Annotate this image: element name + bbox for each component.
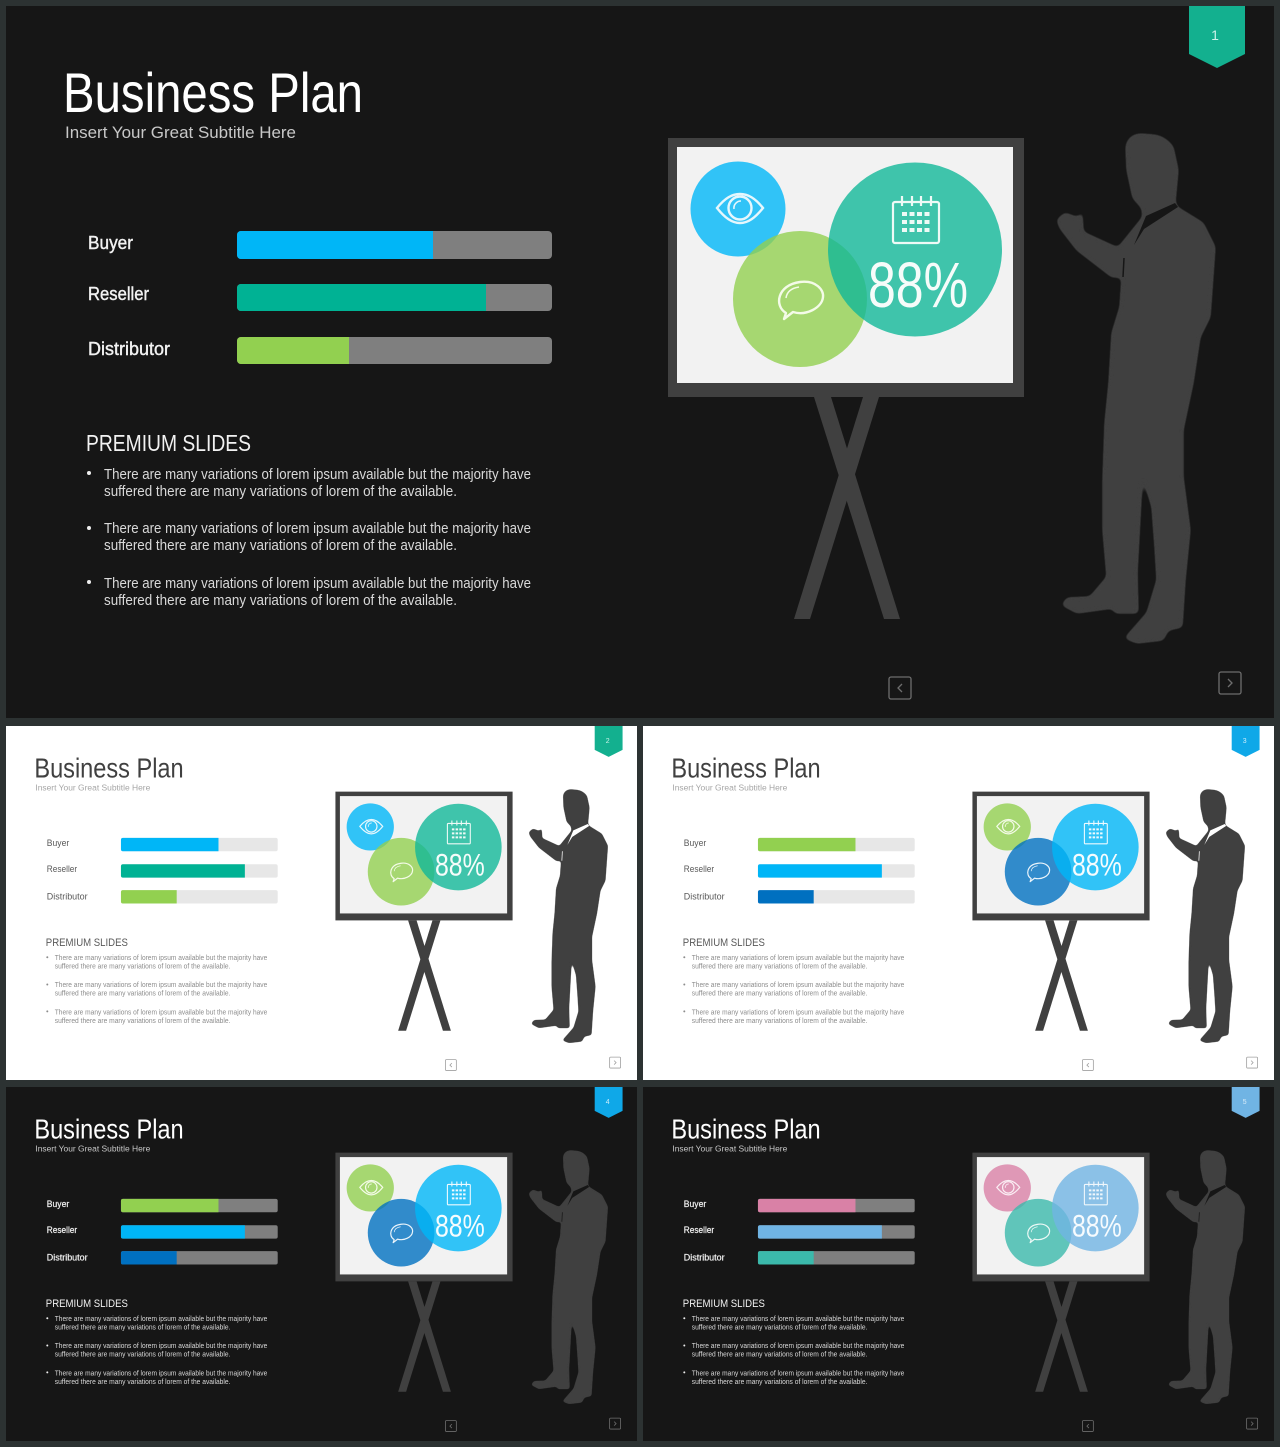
nav button: previous xyxy=(1082,1421,1093,1432)
circle: chat xyxy=(368,838,434,905)
bar chart xyxy=(684,1199,915,1264)
bar: Reseller xyxy=(684,864,915,878)
slide background xyxy=(6,1087,637,1441)
bullet list: There are many variations of lorem ipsum available but the majority have xyxy=(104,521,531,537)
stat: 88%: 88% xyxy=(868,249,968,321)
icon: calendar xyxy=(1084,1181,1107,1205)
nav button: next xyxy=(610,1418,621,1429)
bar: Distributor xyxy=(684,890,915,903)
title: Business Plan xyxy=(671,1114,821,1145)
bar: Buyer: Buyer xyxy=(47,1199,69,1209)
page tab xyxy=(1232,1087,1260,1118)
bar: Reseller: Reseller xyxy=(47,864,77,874)
bullet list: suffered there are many variations of lorem of the available. xyxy=(55,962,230,971)
bullet list: There are many variations of lorem ipsum available but the majority have xyxy=(692,1341,904,1350)
bullet list: suffered there are many variations of lorem of the available. xyxy=(104,538,457,554)
presentation board xyxy=(335,1153,513,1281)
easel legs xyxy=(1035,920,1088,1031)
bar: Buyer: Buyer xyxy=(684,1199,706,1209)
bar: Reseller: Reseller xyxy=(47,1225,77,1235)
bullet list: suffered there are many variations of lorem of the available. xyxy=(104,593,457,609)
stat: 88%: 88% xyxy=(1072,847,1122,883)
bar chart xyxy=(684,838,915,903)
icon: eye xyxy=(997,819,1020,834)
bullet list: There are many variations of lorem ipsum available but the majority have xyxy=(104,467,531,483)
presentation board xyxy=(972,792,1150,920)
icon: eye xyxy=(360,1180,383,1195)
page tab xyxy=(595,1087,623,1118)
bar: Buyer: Buyer xyxy=(47,838,69,848)
presenter silhouette xyxy=(529,1151,608,1404)
circle: calendar xyxy=(1052,804,1139,890)
bullet list: suffered there are many variations of lorem of the available. xyxy=(692,1377,867,1386)
bullet list xyxy=(683,953,904,1025)
bullet list: suffered there are many variations of lorem of the available. xyxy=(55,1016,230,1025)
bar: Distributor xyxy=(47,1251,278,1264)
page tab: 1 xyxy=(1211,27,1219,43)
circle: eye xyxy=(690,162,786,256)
circle: eye xyxy=(347,803,394,851)
nav button: previous xyxy=(445,1060,456,1071)
stat: 88%: 88% xyxy=(435,847,485,883)
bullet list: There are many variations of lorem ipsum available but the majority have xyxy=(55,1368,267,1377)
page tab xyxy=(1232,726,1260,757)
subtitle: Insert Your Great Subtitle Here xyxy=(35,783,151,793)
bar: Reseller xyxy=(47,1225,278,1239)
presentation board xyxy=(668,138,1024,397)
bar: Distributor: Distributor xyxy=(47,1253,88,1263)
section heading: PREMIUM SLIDES xyxy=(86,430,251,456)
bullet list: There are many variations of lorem ipsum available but the majority have xyxy=(55,953,267,962)
nav button: next xyxy=(1219,672,1241,694)
bar: Buyer: Buyer xyxy=(684,838,706,848)
bar chart xyxy=(47,1199,278,1264)
easel legs xyxy=(794,397,900,619)
bullet list: suffered there are many variations of lorem of the available. xyxy=(692,962,867,971)
section heading: PREMIUM SLIDES xyxy=(46,937,128,949)
bullet list: suffered there are many variations of lorem of the available. xyxy=(55,988,230,997)
bullet list: suffered there are many variations of lorem of the available. xyxy=(104,484,457,500)
icon: eye xyxy=(997,1180,1020,1195)
bar: Distributor xyxy=(684,1251,915,1264)
presenter silhouette xyxy=(1057,134,1215,643)
section heading: PREMIUM SLIDES xyxy=(46,1298,128,1310)
icon: calendar xyxy=(1084,820,1107,844)
bar: Reseller: Reseller xyxy=(88,284,149,304)
subtitle: Insert Your Great Subtitle Here xyxy=(672,783,788,793)
circle: eye xyxy=(984,803,1031,851)
bullet list: There are many variations of lorem ipsum available but the majority have xyxy=(55,1007,267,1016)
icon: calendar xyxy=(447,1181,470,1205)
circle: calendar xyxy=(828,162,1002,336)
bar: Reseller xyxy=(88,284,552,311)
easel legs xyxy=(1035,1281,1088,1392)
bar: Buyer: Buyer xyxy=(88,233,133,253)
title: Business Plan xyxy=(34,753,184,784)
subtitle: Insert Your Great Subtitle Here xyxy=(35,1144,151,1154)
circle: chat xyxy=(1005,1199,1071,1266)
bullet list: suffered there are many variations of lorem of the available. xyxy=(55,1377,230,1386)
slide 5: dark slide, pink light-blue teal xyxy=(643,1087,1274,1441)
icon: chat bubble xyxy=(391,1224,413,1243)
subtitle: Insert Your Great Subtitle Here xyxy=(65,123,296,142)
nav button: previous xyxy=(445,1421,456,1432)
page tab: 4 xyxy=(606,1099,610,1106)
page tab: 5 xyxy=(1243,1099,1247,1106)
nav button: previous xyxy=(1082,1060,1093,1071)
bar: Reseller: Reseller xyxy=(684,1225,714,1235)
slide 3: white slide, green blue navy xyxy=(643,726,1274,1080)
presenter silhouette xyxy=(1166,790,1245,1043)
nav button: previous xyxy=(889,677,911,699)
slide 1: large dark slide xyxy=(6,6,1274,718)
page tab: 2 xyxy=(606,738,610,745)
circle: eye xyxy=(347,1164,394,1212)
page tab xyxy=(595,726,623,757)
bar: Reseller xyxy=(47,864,278,878)
bar: Distributor: Distributor xyxy=(88,339,170,359)
easel legs xyxy=(398,1281,451,1392)
bar: Distributor: Distributor xyxy=(684,892,725,902)
bullet list: There are many variations of lorem ipsum available but the majority have xyxy=(692,1007,904,1016)
bar chart xyxy=(88,231,552,364)
bullet list xyxy=(683,1314,904,1386)
slide background xyxy=(6,726,637,1080)
page tab: 3 xyxy=(1243,738,1247,745)
bullet list: suffered there are many variations of lorem of the available. xyxy=(55,1349,230,1358)
section heading: PREMIUM SLIDES xyxy=(683,1298,765,1310)
easel legs xyxy=(398,920,451,1031)
bullet list: There are many variations of lorem ipsum available but the majority have xyxy=(692,1314,904,1323)
title: Business Plan xyxy=(34,1114,184,1145)
icon: chat bubble xyxy=(391,863,413,882)
icon: eye xyxy=(717,194,763,223)
bullet list: There are many variations of lorem ipsum available but the majority have xyxy=(692,1368,904,1377)
bar: Distributor: Distributor xyxy=(684,1253,725,1263)
bullet list: suffered there are many variations of lorem of the available. xyxy=(692,1323,867,1332)
presenter silhouette xyxy=(529,790,608,1043)
bar: Buyer xyxy=(88,231,552,259)
stat: 88%: 88% xyxy=(1072,1208,1122,1244)
nav button: next xyxy=(1247,1057,1258,1068)
bullet list: suffered there are many variations of lorem of the available. xyxy=(692,988,867,997)
slide 4: dark slide, green blue navy xyxy=(6,1087,637,1441)
bar: Buyer xyxy=(684,1199,915,1212)
bar: Reseller xyxy=(684,1225,915,1239)
section heading: PREMIUM SLIDES xyxy=(683,937,765,949)
icon: calendar xyxy=(893,196,939,243)
presentation board xyxy=(972,1153,1150,1281)
bar: Distributor: Distributor xyxy=(47,892,88,902)
icon: calendar xyxy=(447,820,470,844)
bullet list xyxy=(87,467,531,609)
bullet list xyxy=(46,953,267,1025)
bar: Reseller: Reseller xyxy=(684,864,714,874)
bullet list: suffered there are many variations of lorem of the available. xyxy=(692,1016,867,1025)
bullet list: There are many variations of lorem ipsum available but the majority have xyxy=(692,953,904,962)
bullet list: suffered there are many variations of lorem of the available. xyxy=(692,1349,867,1358)
bar: Buyer xyxy=(47,1199,278,1212)
slide 2: white slide, blue green teal xyxy=(6,726,637,1080)
stat: 88%: 88% xyxy=(435,1208,485,1244)
bullet list: suffered there are many variations of lorem of the available. xyxy=(55,1323,230,1332)
circle: chat xyxy=(368,1199,434,1266)
bullet list: There are many variations of lorem ipsum available but the majority have xyxy=(55,1341,267,1350)
slide background xyxy=(6,6,1274,718)
bar chart xyxy=(47,838,278,903)
icon: chat bubble xyxy=(1028,1224,1050,1243)
circle: calendar xyxy=(415,804,502,890)
bullet list xyxy=(46,1314,267,1386)
presenter silhouette xyxy=(1166,1151,1245,1404)
circle: calendar xyxy=(415,1165,502,1251)
title: Business Plan xyxy=(671,753,821,784)
slide background xyxy=(643,1087,1274,1441)
slide background xyxy=(643,726,1274,1080)
circle: calendar xyxy=(1052,1165,1139,1251)
bullet list: There are many variations of lorem ipsum available but the majority have xyxy=(692,980,904,989)
page tab xyxy=(1189,6,1245,68)
nav button: next xyxy=(610,1057,621,1068)
circle: chat xyxy=(1005,838,1071,905)
bar: Buyer xyxy=(684,838,915,851)
nav button: next xyxy=(1247,1418,1258,1429)
bar: Distributor xyxy=(47,890,278,903)
icon: chat bubble xyxy=(1028,863,1050,882)
subtitle: Insert Your Great Subtitle Here xyxy=(672,1144,788,1154)
icon: eye xyxy=(360,819,383,834)
bar: Buyer xyxy=(47,838,278,851)
circle: eye xyxy=(984,1164,1031,1212)
icon: chat bubble xyxy=(779,282,823,319)
bullet list: There are many variations of lorem ipsum available but the majority have xyxy=(55,1314,267,1323)
circle: chat xyxy=(733,231,867,367)
bar: Distributor xyxy=(88,337,552,364)
presentation board xyxy=(335,792,513,920)
title: Business Plan xyxy=(63,61,363,124)
bullet list: There are many variations of lorem ipsum available but the majority have xyxy=(104,576,531,592)
bullet list: There are many variations of lorem ipsum available but the majority have xyxy=(55,980,267,989)
